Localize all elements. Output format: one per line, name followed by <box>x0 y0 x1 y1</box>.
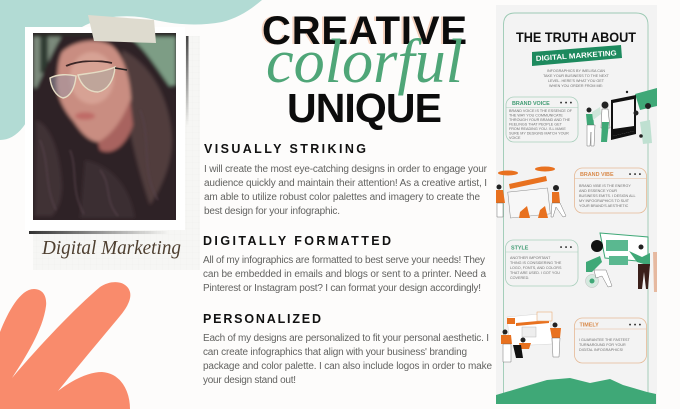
card: brand voice: BRAND VOICE IS THE ESSENCE OF <box>509 109 573 113</box>
card: brand voice: VOICE <box>509 136 521 140</box>
tape <box>88 15 156 43</box>
section: digitally formatted: Pinterest or Instagram post? I can format your design accordingly! <box>203 283 481 294</box>
section: digitally formatted: All of my infographics are formatted to best serve your needs! They <box>203 255 485 266</box>
illustration: presentation and wheelchair <box>586 233 657 292</box>
teal corner blob <box>0 0 262 140</box>
section: personalized: can create infographics that align with your business' branding <box>203 347 467 358</box>
card: style <box>506 240 578 286</box>
section: personalized: package and color palette. I can also include logos in order to make <box>203 361 492 372</box>
card: style: THING IS CONSIDERING THE <box>510 261 562 265</box>
glasses <box>50 67 127 98</box>
section: visually striking: am able to utilize robust color palettes and imagery to create the <box>204 192 480 203</box>
section: digitally formatted <box>203 234 486 294</box>
section: visually striking <box>204 142 488 217</box>
card: timely: I GUARANTEE THE FASTEST <box>579 338 630 342</box>
infographic preview <box>496 5 657 404</box>
illustration: orange team meeting <box>501 312 561 362</box>
section: digitally formatted: can be embedded in emails and blogs or sent to a printer. Need a <box>203 269 486 280</box>
section: visually striking: best design for your infographic. <box>204 206 340 217</box>
section: digitally formatted: DIGITALLY FORMATTED <box>203 234 391 248</box>
card: brand vibe: AND ESSENCE YOUR <box>579 189 617 193</box>
title: UNIQUE <box>287 85 442 131</box>
grid paper <box>33 36 200 270</box>
card: brand vibe: BRAND VIBE <box>580 172 614 178</box>
green ribbon: DIGITAL MARKETING <box>536 48 617 63</box>
intro text: WHEN YOU ORDER FROM ME: <box>549 84 603 88</box>
card: brand voice: ••• <box>560 100 572 106</box>
section: visually striking: VISUALLY STRIKING <box>204 142 366 156</box>
card: brand voice <box>506 97 578 142</box>
card: style: ANOTHER IMPORTANT <box>510 256 551 260</box>
card: style: ••• <box>560 245 572 251</box>
section: personalized: Each of my designs are personalized to fit your personal aesthetic. I <box>203 333 489 344</box>
section: personalized <box>203 312 492 386</box>
title: colorful <box>266 28 463 96</box>
portrait photo <box>33 33 176 225</box>
card: brand voice: SURE MY DESIGNS MATCH YOUR <box>509 132 569 136</box>
hair strands <box>40 142 158 216</box>
green hills <box>496 378 656 404</box>
card: brand voice: FROM READING YOU. I'LL MAKE <box>509 127 566 131</box>
card: brand vibe: MY INFOGRAPHICS TO SUIT <box>579 199 630 203</box>
intro text: INFOGRAPHICS BY IMELISA CAN <box>547 69 605 73</box>
title <box>260 9 467 131</box>
card: style: STYLE <box>511 246 529 252</box>
illustration: phone and team <box>586 88 657 146</box>
card: style: THAT ARE USED. I GOT YOU <box>510 271 560 275</box>
intro text <box>543 69 610 88</box>
intro text: LEVEL. HERE'S WHAT YOU GET <box>548 79 605 83</box>
card: timely <box>574 318 646 363</box>
eyebrow <box>66 61 112 66</box>
section: visually striking: I will create the most eye-catching designs in order to engage your <box>204 164 488 175</box>
card: style: COVERED. <box>510 276 529 280</box>
card: timely: ••• <box>629 322 641 328</box>
polaroid photo frame <box>25 27 185 230</box>
card: brand voice: BRAND VOICE <box>512 101 550 107</box>
caption: Digital Marketing <box>41 237 181 259</box>
card: brand voice: THE WAY YOU COMMUNICATE <box>509 114 563 118</box>
section: personalized: your design stand out! <box>203 375 296 386</box>
intro text: TAKE YOUR BUSINESS TO THE NEXT <box>543 74 610 78</box>
section: visually striking: audience quickly and maintain their attention! As a creative artist, I <box>204 178 487 189</box>
green ribbon <box>532 45 622 66</box>
card: timely: TURNAROUND FOR YOUR <box>579 343 626 347</box>
card: brand voice: THROUGH YOUR BRAND AND THE <box>509 118 571 122</box>
preview title: THE TRUTH ABOUT <box>516 29 636 45</box>
card: timely: DIGITAL INFOGRAPHICS! <box>579 348 623 352</box>
title: CREATIVE <box>262 9 467 53</box>
orange leaf shape <box>0 282 130 409</box>
polaroid shadow <box>29 36 188 234</box>
card: brand voice: FEELINGS THAT PEOPLE GET <box>509 122 563 126</box>
card: style: LOGO, FONTS, AND COLORS <box>510 266 562 270</box>
card: brand vibe: BUSINESS EMITS. I DESIGN ALL <box>579 194 636 198</box>
section: personalized: PERSONALIZED <box>203 312 321 326</box>
title: CREATIVE <box>260 9 465 53</box>
card: brand vibe: ••• <box>629 172 641 178</box>
card: brand vibe <box>574 168 646 213</box>
card: timely: TIMELY <box>580 322 599 328</box>
card: brand vibe: YOUR BRAND'S AESTHETIC <box>579 204 629 208</box>
card: brand vibe: BRAND VIBE IS THE ENERGY <box>579 184 631 188</box>
illustration: orange planning board <box>496 166 566 218</box>
